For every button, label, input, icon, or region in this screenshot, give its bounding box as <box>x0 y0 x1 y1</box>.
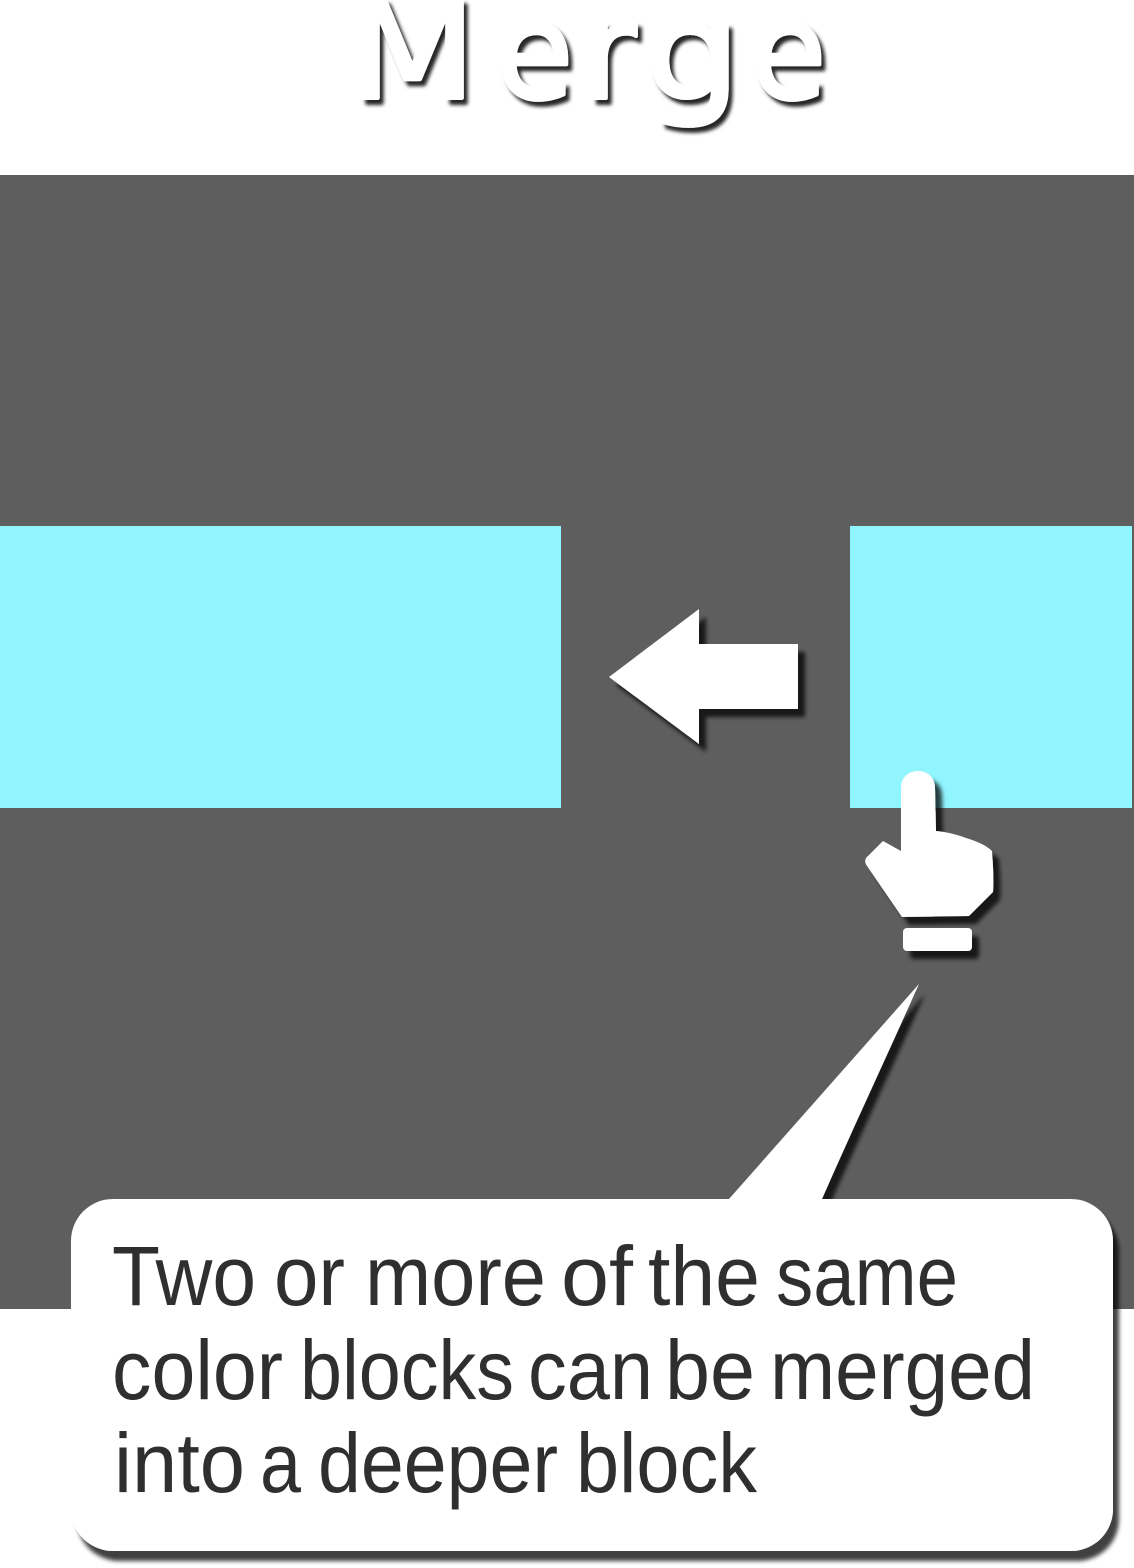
callout text: blocks <box>300 1323 514 1417</box>
panel: game board <box>0 175 1134 1309</box>
callout text: color <box>112 1323 283 1417</box>
callout: speech bubble <box>71 984 1113 1551</box>
icon: pointing hand <box>865 771 993 951</box>
callout text: Two <box>112 1229 256 1323</box>
callout text: be <box>665 1323 755 1417</box>
callout text: or <box>274 1229 345 1323</box>
callout text: deeper <box>318 1416 558 1510</box>
callout text: same <box>776 1229 958 1323</box>
callout text <box>112 1229 1035 1510</box>
block: right cyan block <box>850 526 1132 808</box>
callout text: the <box>648 1229 760 1323</box>
callout text: block <box>576 1416 758 1510</box>
arrow: pointing left <box>609 609 798 744</box>
callout text: into <box>114 1416 245 1510</box>
callout text: merged <box>770 1323 1035 1417</box>
callout text: of <box>561 1229 634 1323</box>
callout text: can <box>528 1323 653 1417</box>
block: left cyan block <box>0 526 561 808</box>
callout text: more <box>365 1229 546 1323</box>
callout text: a <box>260 1416 301 1510</box>
title <box>349 0 826 130</box>
